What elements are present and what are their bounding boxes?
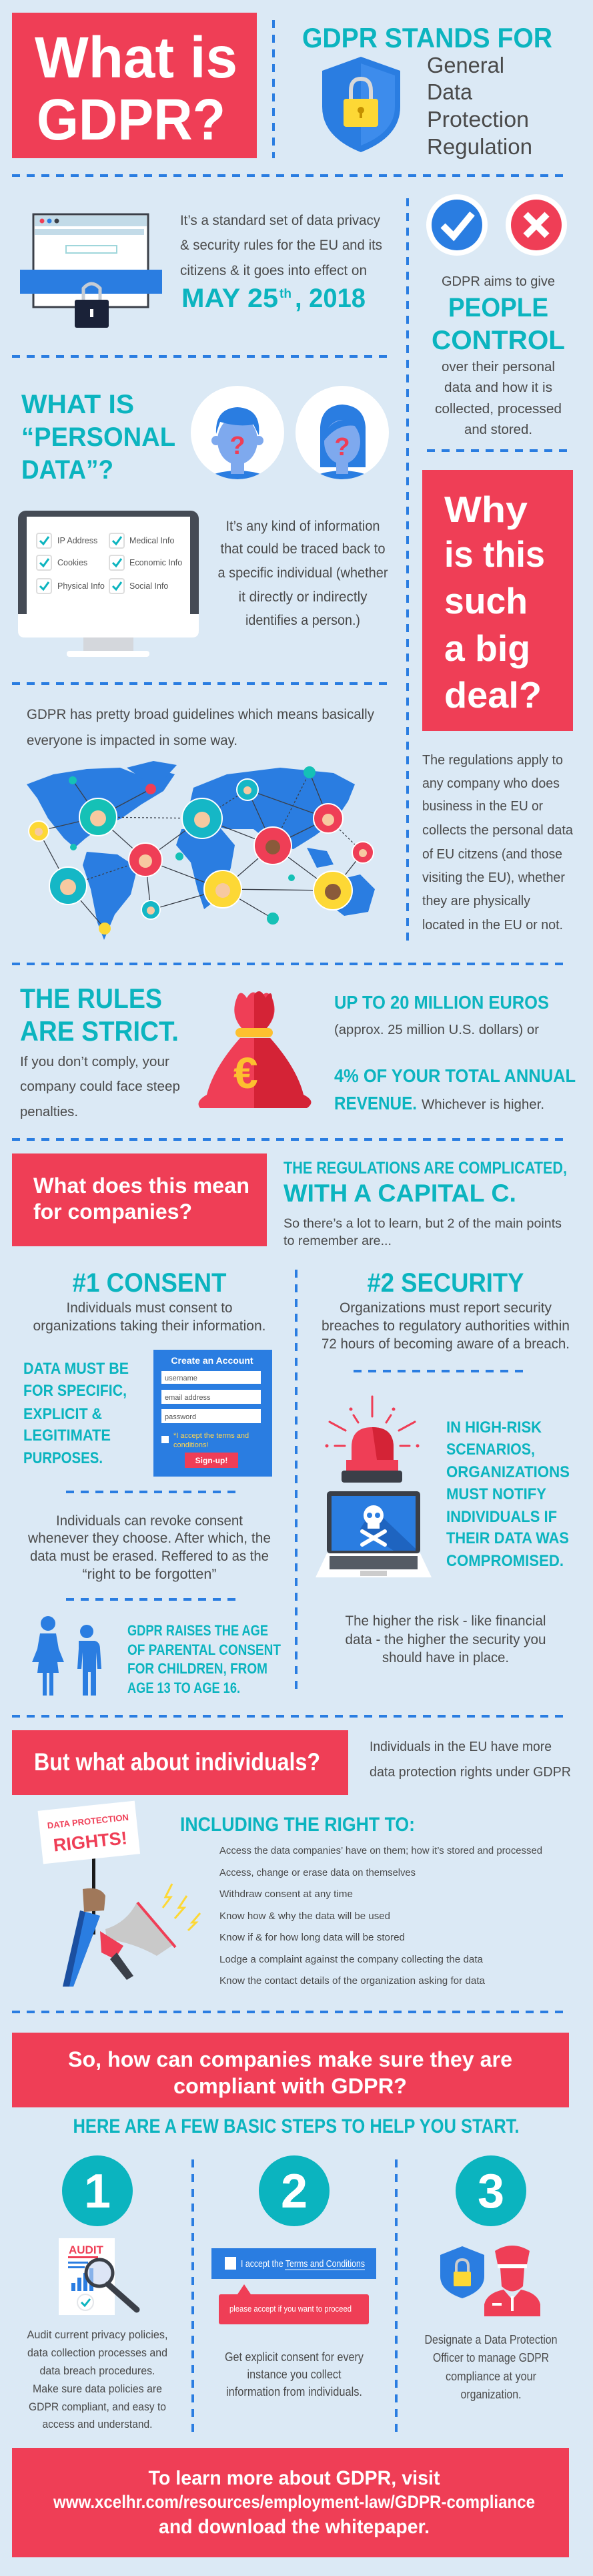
icon: audit document: AUDIT	[69, 2244, 104, 2256]
text: parental consent age: AGE 13 TO AGE 16.	[127, 1680, 240, 1696]
text: people control: GDPR aims to give	[442, 274, 555, 289]
icon: protest sign and megaphone	[38, 1801, 200, 1987]
text: standard set of data privacy	[180, 213, 382, 278]
icon: monitor with personal data checklist: Physical Info	[57, 581, 105, 591]
text: high-risk scenarios: ORGANIZATIONS	[446, 1463, 570, 1481]
text: people control: CONTROL	[432, 326, 565, 355]
icon: terms checkbox and warning: please accept if you want to proceed	[229, 2304, 352, 2314]
text: explicit consent	[225, 2350, 364, 2398]
title block	[12, 13, 257, 158]
heading: #2 security: breaches to regulatory authorities within	[322, 1318, 570, 1334]
text: fines: REVENUE.	[334, 1093, 417, 1113]
text: data must be for specific purposes: PURPOSES.	[23, 1449, 103, 1467]
text: audit: Audit current privacy policies,	[27, 2328, 168, 2341]
text: parental consent age	[127, 1622, 281, 1696]
text: high-risk scenarios: MUST NOTIFY	[446, 1485, 546, 1503]
text: data must be for specific purposes: DATA MUST BE	[23, 1360, 129, 1378]
icon: monitor with personal data checklist: Economic Info	[129, 558, 182, 567]
world map with connected people	[27, 761, 375, 940]
list: rights: Access, change or erase data on themselves	[219, 1867, 416, 1878]
icon: create account form	[153, 1350, 272, 1477]
text: fines: UP TO 20 MILLION EUROS	[334, 992, 549, 1013]
list: rights	[219, 1845, 542, 1987]
footer: learn more	[12, 2448, 569, 2557]
heading: #1 consent	[33, 1268, 265, 1334]
text: General Data Protection Regulation: Protection	[427, 107, 529, 132]
list: rights: Know the contact details of the organization asking for data	[219, 1975, 486, 1987]
icon: audit document	[59, 2238, 137, 2315]
heading: #2 security: #2 SECURITY	[367, 1268, 524, 1298]
panel: but what about individuals	[12, 1730, 348, 1795]
panel: why is this such a big deal: is this	[444, 533, 545, 575]
text: broad guidelines: everyone is impacted in some way.	[27, 733, 237, 748]
footer: learn more: www.xcelhr.com/resources/employment-law/GDPR-compliance	[53, 2492, 535, 2512]
text: General Data Protection Regulation: Data	[427, 79, 473, 104]
icon: create account form: Create an Account	[171, 1355, 253, 1366]
text: standard set of data privacy: It’s a standard set of data privacy	[180, 213, 380, 228]
text: people control: PEOPLE	[448, 293, 548, 322]
text: high-risk scenarios: INDIVIDUALS IF	[446, 1508, 557, 1526]
date: May 25th 2018	[181, 284, 366, 313]
icon: euro money bag: €	[233, 1048, 258, 1097]
text: right to be forgotten: Individuals can revoke consent	[56, 1513, 243, 1529]
text: audit: data breach procedures.	[40, 2364, 155, 2377]
text: regulations apply to: of EU citzens (and those	[422, 847, 562, 862]
text: regulations apply to	[422, 753, 574, 933]
icon: shield and data protection officer	[440, 2246, 540, 2316]
panel: why is this such a big deal: a big	[444, 627, 530, 669]
heading: #1 consent: organizations taking their information.	[33, 1318, 265, 1334]
text: parental consent age: FOR CHILDREN, FROM	[127, 1660, 267, 1677]
panel: how can companies be compliant	[12, 2033, 569, 2107]
icon: create account form: email address	[165, 1394, 211, 1402]
text: higher the risk	[346, 1613, 546, 1665]
heading: the rules are strict: ARE STRICT.	[20, 1015, 179, 1047]
heading: #2 security	[322, 1268, 570, 1352]
text: definition of personal data	[217, 519, 388, 628]
icon: protest sign and megaphone: RIGHTS!	[53, 1828, 128, 1856]
text: definition of personal data: it directly or indirectly	[239, 589, 368, 605]
text: definition of personal data: It’s any kind of information	[225, 519, 380, 534]
icon: create account form: Sign-up!	[195, 1456, 227, 1465]
icon: two children	[32, 1616, 101, 1696]
list: rights: Lodge a complaint against the company collecting the data	[219, 1954, 484, 1965]
text: data protection officer: organization.	[460, 2388, 522, 2401]
icons: check and cross	[426, 194, 567, 256]
text: regulations apply to: any company who does	[422, 776, 560, 791]
text: data must be for specific purposes: EXPLICIT &	[23, 1405, 102, 1423]
text: high-risk scenarios: THEIR DATA WAS	[446, 1529, 569, 1547]
icon: monitor with personal data checklist: IP Address	[57, 536, 97, 545]
list: rights: Know if & for how long data will be stored	[219, 1932, 405, 1943]
icon: two anonymous people	[191, 386, 389, 479]
text: data must be for specific purposes: FOR SPECIFIC,	[23, 1382, 127, 1400]
text: high-risk scenarios: COMPROMISED.	[446, 1552, 564, 1570]
panel: why is this such a big deal: such	[444, 580, 528, 621]
text: definition of personal data: identifies a person.)	[245, 613, 360, 628]
text: penalties: If you don’t comply, your	[20, 1055, 169, 1069]
text: explicit consent: Get explicit consent for every	[225, 2350, 364, 2364]
heading: #2 security: Organizations must report security	[340, 1300, 552, 1316]
text: explicit consent: instance you collect	[247, 2368, 342, 2381]
text: right to be forgotten: “right to be forgotten”	[83, 1567, 217, 1582]
icon: shield with lock	[322, 57, 400, 152]
icon: protest sign and megaphone: DATA PROTECTION	[47, 1812, 129, 1830]
text: people control: and stored.	[464, 423, 532, 437]
heading: what is personal data: WHAT IS	[21, 390, 134, 419]
text: General Data Protection Regulation: General	[427, 53, 504, 77]
text: data protection officer: Officer to manage GDPR	[433, 2351, 549, 2364]
text: penalties: penalties.	[20, 1105, 78, 1119]
heading: #1 consent: Individuals must consent to	[67, 1300, 232, 1316]
title block: GDPR?	[37, 87, 225, 152]
panel: what does this mean for companies: for companies?	[33, 1200, 192, 1224]
icon: monitor with personal data checklist: Social Info	[129, 581, 168, 591]
icon: create account form: username	[165, 1374, 197, 1382]
text: data protection officer	[424, 2333, 558, 2401]
text: regulations apply to: The regulations apply to	[422, 753, 563, 768]
text: higher the risk: data - the higher the security you	[346, 1632, 546, 1647]
icon: terms checkbox and warning: I accept the Terms and Conditions	[241, 2258, 365, 2270]
heading: #1 consent: #1 CONSENT	[72, 1268, 227, 1298]
text: high-risk scenarios	[446, 1419, 570, 1570]
heading: GDPR stands for: GDPR STANDS FOR	[302, 22, 552, 53]
text: audit	[27, 2328, 168, 2430]
text: parental consent age: GDPR RAISES THE AGE	[127, 1622, 268, 1639]
text: higher the risk: should have in place.	[382, 1650, 509, 1665]
text: people control	[432, 274, 565, 437]
text: standard set of data privacy: & security rules for the EU and its	[180, 238, 382, 253]
panel: how can companies be compliant: compliant with GDPR?	[173, 2074, 407, 2098]
text: audit: GDPR compliant, and easy to	[29, 2400, 166, 2413]
icon: monitor with personal data checklist	[18, 511, 199, 657]
text: high-risk scenarios: IN HIGH-RISK	[446, 1419, 542, 1437]
heading: what is personal data: “PERSONAL	[21, 423, 175, 452]
footer: learn more: and download the whitepaper.	[159, 2516, 430, 2538]
text: right to be forgotten	[27, 1513, 271, 1582]
text: regulations apply to: business in the EU or	[422, 799, 543, 814]
step numbers	[62, 2155, 526, 2226]
heading: what is personal data	[21, 390, 175, 485]
text: individuals have more rights: data protection rights under GDPR	[370, 1765, 571, 1780]
icon: browser with lock	[20, 214, 162, 328]
panel: what does this mean for companies	[12, 1153, 267, 1246]
text: explicit consent: information from individuals.	[226, 2385, 362, 2398]
text: broad guidelines	[27, 707, 374, 748]
heading: the rules are strict: THE RULES	[20, 983, 162, 1014]
icon: monitor with personal data checklist: Medical Info	[129, 536, 174, 545]
icon: create account form: *I accept the terms and	[173, 1432, 249, 1440]
text: higher the risk: The higher the risk - like financial	[346, 1613, 546, 1629]
text: right to be forgotten: data must be erased. Reffered to as the	[30, 1549, 269, 1564]
heading: the rules are strict	[20, 983, 179, 1047]
panel: why is this such a big deal	[422, 470, 573, 731]
icon: create account form: password	[165, 1413, 196, 1421]
heading: #2 security: 72 hours of becoming aware of a breach.	[322, 1336, 570, 1352]
text: right to be forgotten: whenever they choose. After which, the	[27, 1531, 271, 1546]
text: parental consent age: OF PARENTAL CONSENT	[127, 1641, 281, 1658]
panel: why is this such a big deal: deal?	[444, 674, 542, 716]
title block: What is	[35, 25, 237, 90]
step numbers: 2	[281, 2165, 308, 2218]
text: data protection officer: compliance at your	[446, 2370, 536, 2383]
text: regulations apply to: located in the EU or not.	[422, 918, 563, 933]
text: definition of personal data: that could be traced back to	[220, 541, 386, 557]
text: penalties: company could face steep	[20, 1079, 180, 1094]
text: high-risk scenarios: SCENARIOS,	[446, 1441, 535, 1459]
text: penalties	[20, 1055, 180, 1119]
text: people control: collected, processed	[435, 402, 562, 417]
icon: terms checkbox and warning	[211, 2248, 376, 2324]
text: regulations apply to: visiting the EU), whether	[422, 870, 565, 885]
text: definition of personal data: a specific individual (whether	[217, 565, 388, 581]
icon: euro money bag	[199, 991, 311, 1108]
list: rights: Access the data companies’ have on them; how it’s stored and processed	[219, 1845, 542, 1856]
text: data must be for specific purposes	[23, 1360, 129, 1467]
list: rights: Withdraw consent at any time	[219, 1888, 353, 1900]
text: data must be for specific purposes: LEGITIMATE	[23, 1427, 111, 1445]
date: May 25th 2018: , 2018	[295, 284, 366, 313]
text: individuals have more rights	[370, 1740, 571, 1780]
text: audit: data collection processes and	[27, 2346, 167, 2359]
panel: how can companies be compliant: So, how can companies make sure they are	[68, 2047, 512, 2071]
heading: basic steps: HERE ARE A FEW BASIC STEPS TO HELP YOU START.	[73, 2115, 519, 2137]
text: standard set of data privacy: citizens & it goes into effect on	[180, 263, 367, 278]
text: people control: over their personal	[442, 360, 555, 374]
footer: learn more: To learn more about GDPR, visit	[148, 2467, 440, 2489]
text: audit: access and understand.	[43, 2418, 152, 2430]
icon: laptop with skull	[316, 1491, 432, 1577]
icon: create account form: conditions!	[173, 1441, 209, 1449]
panel: why is this such a big deal: Why	[444, 489, 528, 530]
date: May 25th 2018: th	[279, 287, 291, 301]
text: individuals have more rights: Individuals in the EU have more	[370, 1740, 552, 1754]
text: complicated regulations: So there’s a lot to learn, but 2 of the main points	[283, 1217, 562, 1231]
panel: but what about individuals: But what about individuals?	[34, 1748, 320, 1776]
date: May 25th 2018: MAY 25	[181, 284, 278, 313]
text: General Data Protection Regulation	[427, 53, 532, 159]
text: complicated regulations: to remember are...	[283, 1234, 392, 1248]
text: fines: (approx. 25 million U.S. dollars) or	[334, 1023, 539, 1037]
step numbers: 1	[84, 2165, 111, 2218]
icon: siren	[326, 1396, 419, 1483]
icon: monitor with personal data checklist: Cookies	[57, 558, 87, 567]
heading: what is personal data: DATA”?	[21, 455, 113, 485]
heading: including the right to: INCLUDING THE RIGHT TO:	[180, 1814, 415, 1836]
text: regulations apply to: collects the personal data	[422, 823, 574, 838]
text: complicated regulations: WITH A CAPITAL C.	[283, 1180, 516, 1207]
text: complicated regulations	[283, 1159, 567, 1248]
icon: two anonymous people: ?	[334, 433, 350, 461]
list: rights: Know how & why the data will be used	[219, 1910, 390, 1922]
text: fines: Whichever is higher.	[422, 1097, 544, 1112]
text: data protection officer: Designate a Data Protection	[424, 2333, 558, 2346]
text: people control: data and how it is	[444, 380, 552, 395]
icon: two anonymous people: ?	[229, 432, 245, 460]
text: fines: 4% OF YOUR TOTAL ANNUAL	[334, 1065, 576, 1086]
text: regulations apply to: they are physically	[422, 894, 530, 909]
panel: what does this mean for companies: What does this mean	[33, 1174, 249, 1198]
text: broad guidelines: GDPR has pretty broad guidelines which means basically	[27, 707, 374, 722]
text: fines	[334, 992, 576, 1113]
text: audit: Make sure data policies are	[33, 2382, 162, 2395]
text: General Data Protection Regulation: Regulation	[427, 134, 532, 159]
step numbers: 3	[478, 2165, 504, 2218]
